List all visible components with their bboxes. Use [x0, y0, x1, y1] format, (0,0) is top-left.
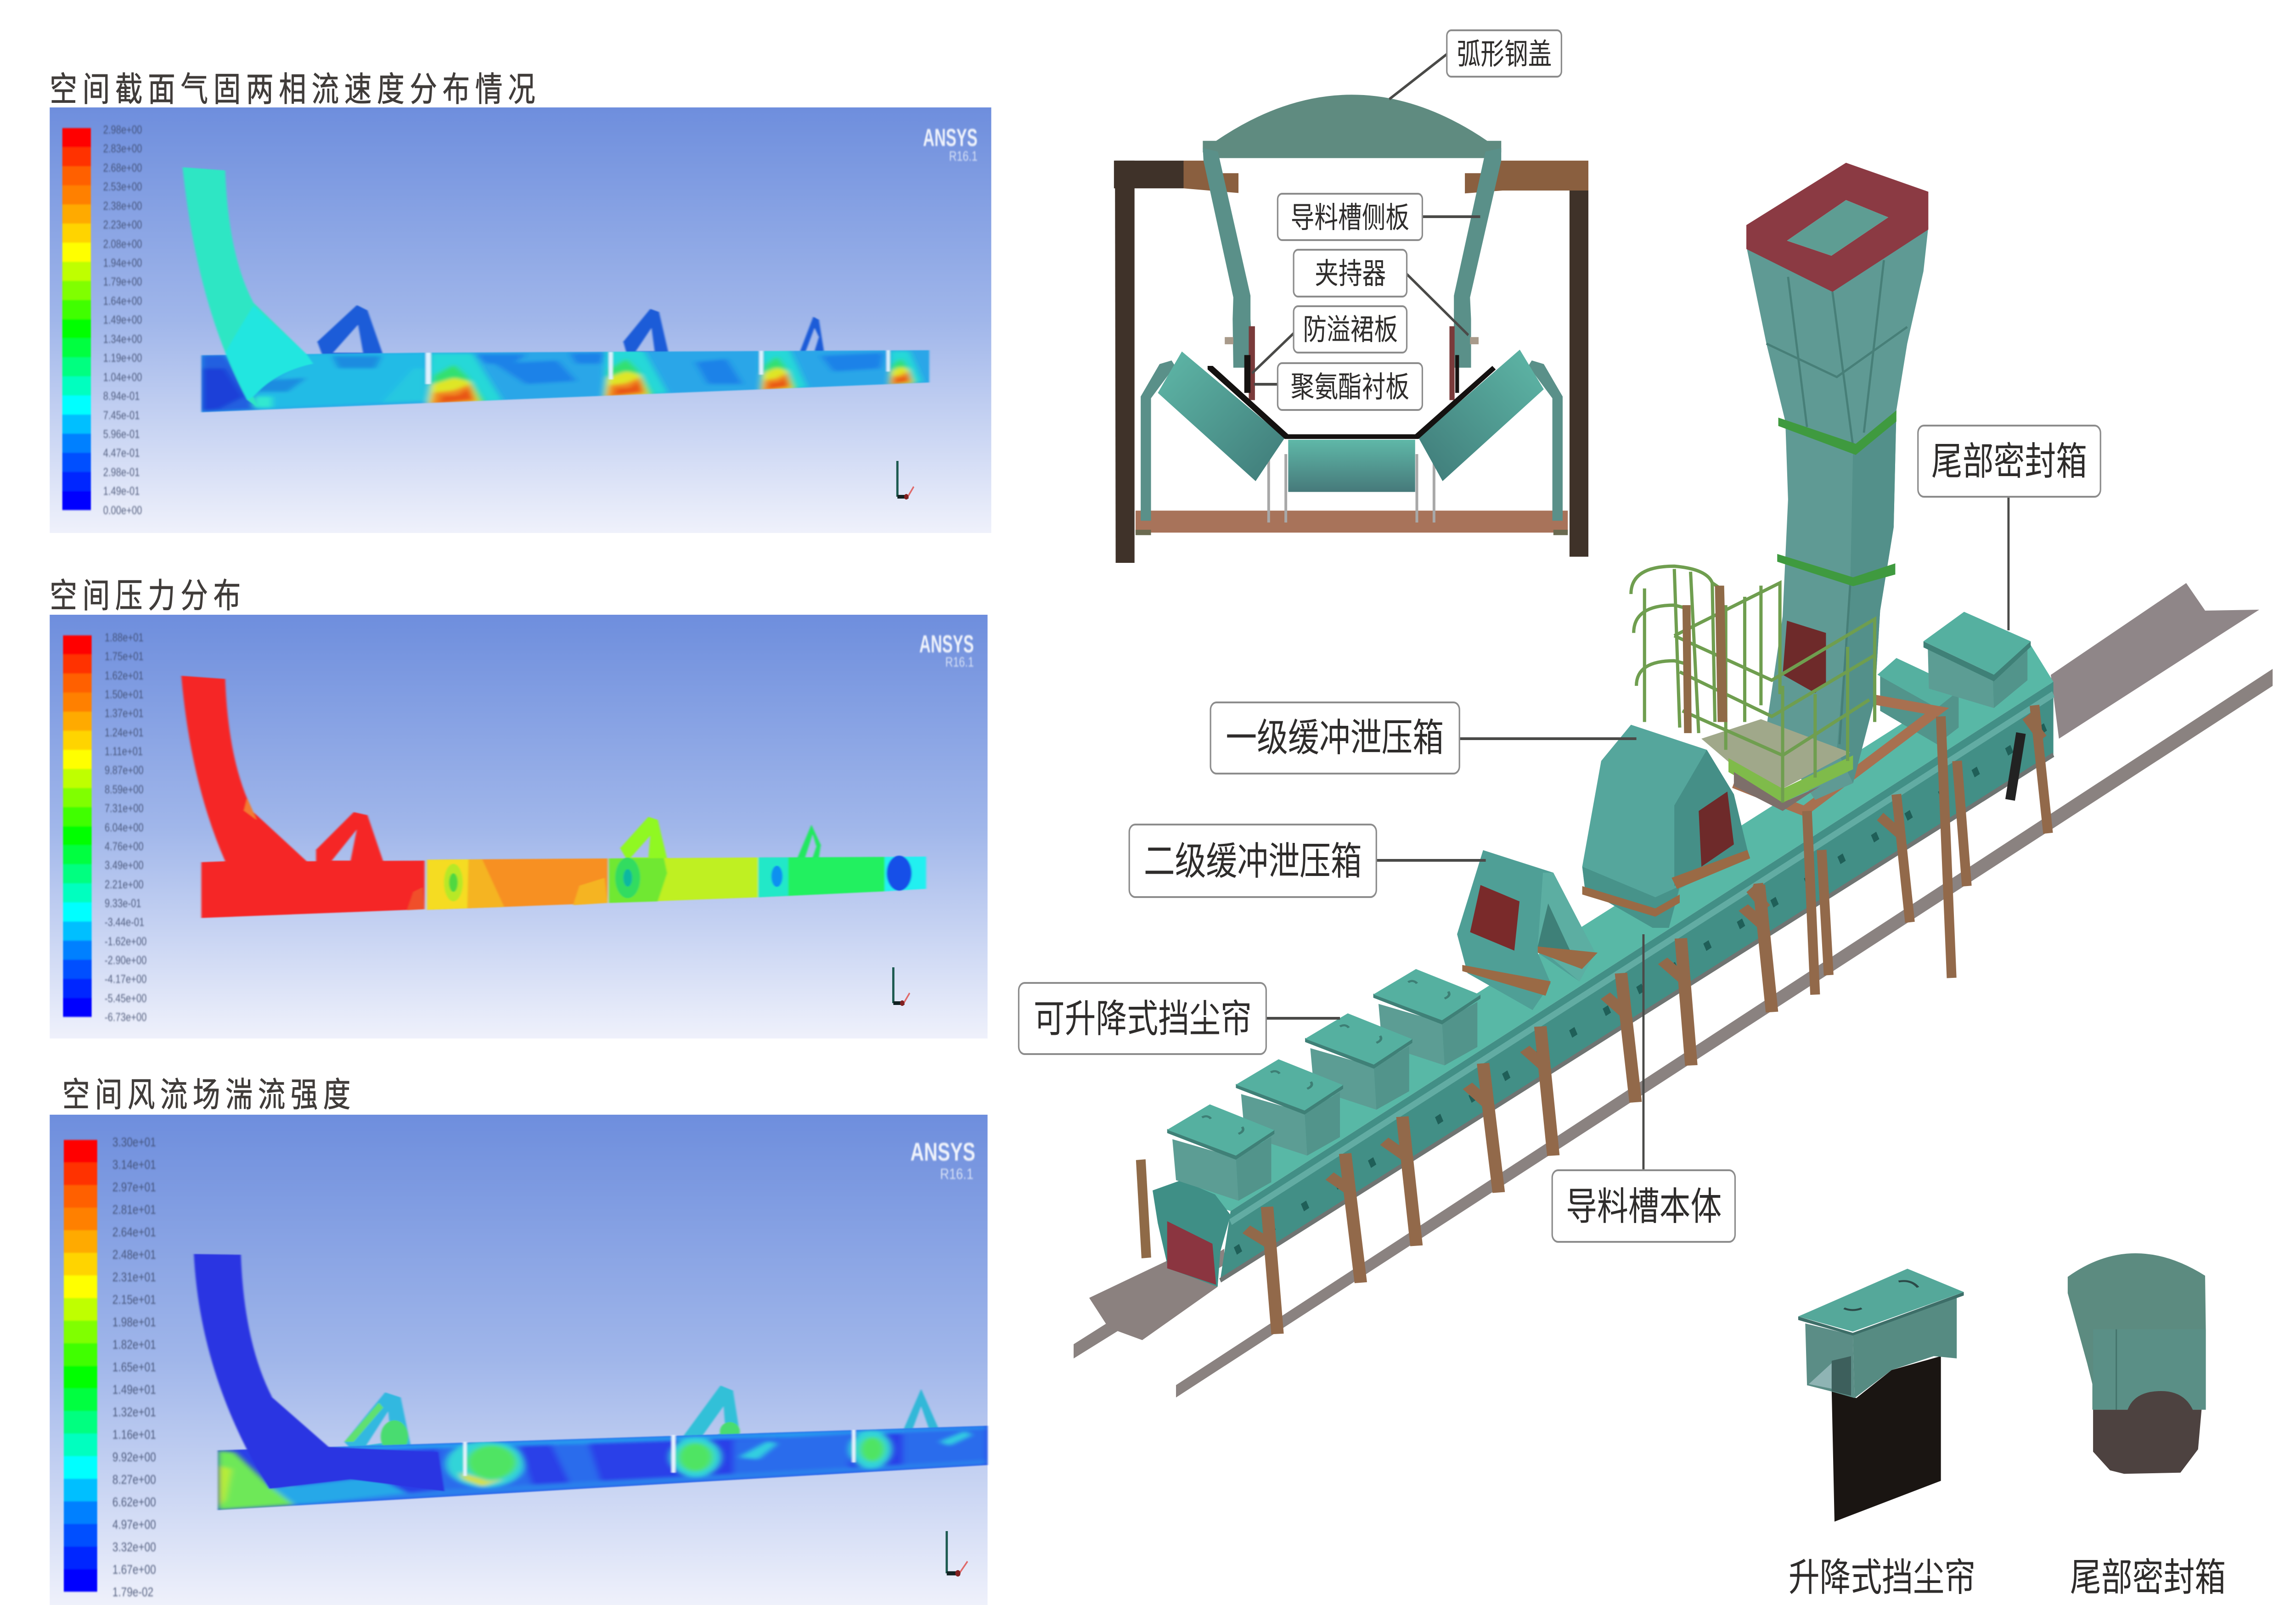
colour legend: velocity: 1.04e+00 — [103, 370, 142, 384]
colour legend: pressure: -3.44e-01 — [105, 915, 144, 929]
colour legend: velocity: 1.79e+00 — [103, 275, 142, 288]
colour legend: velocity: 2.38e+00 — [103, 199, 142, 213]
colour legend: velocity: 1.94e+00 — [103, 256, 142, 269]
label: primary buffer relief box: 一级缓冲泄压箱 — [1226, 717, 1444, 760]
label: chute side plate — [1277, 194, 1480, 240]
pressure contour geometry — [181, 676, 926, 918]
ANSYS logo — [919, 631, 974, 670]
colour legend: velocity: 5.96e-01 — [103, 427, 140, 441]
colour legend: velocity: 2.98e-01 — [103, 466, 140, 479]
safety cage and handrails — [1631, 566, 1875, 802]
colour legend: velocity: 2.23e+00 — [103, 218, 142, 231]
axis triad — [897, 461, 914, 499]
colour legend: pressure: 1.37e+01 — [105, 707, 144, 720]
colour legend: pressure: 9.87e+00 — [105, 763, 144, 777]
arc steel cover — [1203, 95, 1501, 368]
title: pressure panel: 空间压力分布 — [50, 577, 241, 615]
colour legend: turbulence: 4.97e+00 — [113, 1518, 156, 1532]
dust curtain boxes — [1167, 969, 1480, 1201]
colour legend: turbulence: 1.79e-02 — [113, 1585, 153, 1599]
colour legend: velocity: 2.68e+00 — [103, 161, 142, 174]
isometric chute assembly — [1074, 163, 2273, 1397]
colour legend: pressure: 6.04e+00 — [105, 821, 144, 834]
colour legend: turbulence: 2.48e+01 — [113, 1248, 156, 1262]
colour legend: pressure: -4.17e+00 — [105, 972, 146, 986]
colour legend: velocity: 2.08e+00 — [103, 237, 142, 251]
rods — [1269, 454, 1434, 522]
ANSYS logo: ANSYS — [911, 1137, 975, 1166]
label: chute side plate: 导料槽侧板 — [1291, 202, 1409, 234]
colour legend: velocity: 2.53e+00 — [103, 180, 142, 193]
ANSYS logo: R16.1 — [949, 148, 978, 164]
colour legend: pressure: 2.21e+00 — [105, 878, 144, 891]
colour legend: velocity: 1.49e+00 — [103, 313, 142, 326]
panel: turbulence intensity contour — [50, 1115, 988, 1605]
back support post — [1141, 1160, 1146, 1258]
belt / polyurethane liner — [1208, 366, 1496, 439]
hopper tube — [1746, 227, 1928, 800]
colour legend: turbulence: 1.49e+01 — [113, 1383, 156, 1397]
colour legend: turbulence: 3.30e+01 — [113, 1135, 156, 1150]
colour legend: turbulence: 2.15e+01 — [113, 1293, 156, 1307]
colour legend: turbulence: 1.82e+01 — [113, 1338, 156, 1352]
colour legend: turbulence: 1.32e+01 — [113, 1405, 156, 1420]
axis triad — [947, 1531, 968, 1577]
colour legend: pressure: -5.45e+00 — [105, 992, 146, 1005]
support frame — [1114, 161, 1588, 563]
colour legend: pressure — [63, 631, 146, 1024]
ANSYS logo: ANSYS — [919, 631, 974, 658]
colour legend: pressure: 7.31e+00 — [105, 802, 144, 815]
colour legend: velocity: 2.83e+00 — [103, 142, 142, 155]
hopper door — [1783, 621, 1826, 693]
label: clamp — [1294, 250, 1469, 335]
colour legend: pressure: 1.75e+01 — [105, 650, 144, 663]
caption: tail seal box: 尾部密封箱 — [2070, 1556, 2226, 1599]
idler rollers — [1158, 350, 1544, 492]
secondary buffer box — [1457, 850, 1598, 1010]
caption: lifting dust curtain: 升降式挡尘帘 — [1789, 1556, 1975, 1599]
skirt and clamp — [1225, 326, 1479, 400]
title: velocity panel: 空间截面气固两相流速度分布情况 — [50, 71, 535, 109]
label: chute body — [1552, 934, 1735, 1242]
colour legend: pressure: -6.73e+00 — [105, 1010, 146, 1024]
colour legend: pressure: -2.90e+00 — [105, 954, 146, 967]
label: chute body: 导料槽本体 — [1566, 1185, 1722, 1229]
panel: gas-solid velocity contour — [50, 107, 991, 533]
colour legend: pressure: 4.76e+00 — [105, 840, 144, 853]
far-end seal boxes — [1877, 612, 2031, 744]
platform — [1701, 719, 1850, 789]
colour legend: pressure: -1.62e+00 — [105, 935, 146, 948]
label: tail seal box — [1918, 426, 2100, 630]
colour legend: turbulence: 1.16e+01 — [113, 1428, 156, 1442]
colour legend: pressure: 1.24e+01 — [105, 726, 144, 739]
colour legend: turbulence: 9.92e+00 — [113, 1450, 156, 1465]
conveyor belt and rails — [1074, 583, 2273, 1397]
label: clamp: 夹持器 — [1315, 258, 1386, 290]
feed hopper, platform and cage — [1631, 163, 1937, 811]
primary buffer box — [1582, 725, 1750, 928]
ANSYS logo: R16.1 — [940, 1166, 974, 1183]
axis triad — [893, 967, 910, 1006]
panel: pressure contour — [50, 615, 988, 1038]
label: liftable dust curtain — [1019, 983, 1340, 1054]
colour legend: turbulence — [64, 1135, 156, 1599]
colour legend: velocity: 4.47e-01 — [103, 446, 140, 460]
chute entry arch and curtain — [1153, 1180, 1231, 1287]
ANSYS logo: R16.1 — [945, 654, 974, 670]
colour legend: turbulence: 6.62e+00 — [113, 1495, 156, 1510]
colour legend: velocity: 7.45e-01 — [103, 409, 140, 422]
label: polyurethane liner: 聚氨酯衬板 — [1291, 371, 1409, 404]
colour legend: turbulence: 2.97e+01 — [113, 1180, 156, 1195]
colour legend: turbulence: 1.65e+01 — [113, 1360, 156, 1375]
velocity contour geometry — [183, 167, 929, 412]
colour legend: turbulence: 3.32e+00 — [113, 1540, 156, 1554]
label: secondary buffer relief box: 二级缓冲泄压箱 — [1144, 840, 1362, 883]
colour legend: turbulence: 2.64e+01 — [113, 1225, 156, 1240]
colour legend: velocity: 1.64e+00 — [103, 294, 142, 308]
title: turbulence panel: 空间风流场湍流强度 — [62, 1076, 350, 1114]
label: secondary buffer relief box — [1129, 825, 1486, 897]
turbulence contour geometry — [194, 1254, 988, 1510]
colour legend: velocity: 1.34e+00 — [103, 332, 142, 346]
chute body — [1169, 643, 2054, 1280]
colour legend: turbulence: 1.67e+00 — [113, 1563, 156, 1577]
label: polyurethane liner — [1254, 363, 1422, 410]
colour legend: turbulence: 1.98e+01 — [113, 1315, 156, 1330]
ANSYS logo — [911, 1137, 975, 1183]
colour legend: turbulence: 3.14e+01 — [113, 1158, 156, 1172]
label: anti-spill skirt — [1252, 306, 1407, 373]
roller brackets — [1141, 360, 1563, 521]
colour legend: turbulence: 8.27e+00 — [113, 1473, 156, 1487]
detail: tail seal box — [2068, 1253, 2206, 1474]
cross-section drawing of guide chute — [1114, 95, 1588, 563]
red top collar — [1746, 163, 1928, 292]
colour legend: velocity: 8.94e-01 — [103, 389, 140, 403]
colour legend: pressure: 1.50e+01 — [105, 688, 144, 701]
colour legend: turbulence: 2.31e+01 — [113, 1270, 156, 1285]
colour legend: velocity: 0.00e+00 — [103, 504, 142, 517]
colour legend: velocity: 1.49e-01 — [103, 484, 140, 498]
brown support beams — [1734, 700, 1937, 811]
chute support legs — [1246, 705, 2048, 1334]
colour legend: pressure: 1.88e+01 — [105, 631, 144, 644]
colour legend: turbulence: 2.81e+01 — [113, 1203, 156, 1217]
detail: lifting dust curtain — [1798, 1268, 1964, 1521]
colour legend: pressure: 1.11e+01 — [105, 745, 143, 758]
colour legend: pressure: 3.49e+00 — [105, 859, 144, 872]
colour legend: pressure: 9.33e-01 — [105, 897, 141, 910]
label: arc steel cover: 弧形钢盖 — [1457, 38, 1552, 71]
label: tail seal box: 尾部密封箱 — [1931, 440, 2087, 483]
label: anti-spill skirt: 防溢裙板 — [1303, 314, 1398, 346]
ANSYS logo: ANSYS — [923, 124, 978, 152]
label: arc steel cover — [1390, 30, 1561, 99]
colour legend: velocity: 1.19e+00 — [103, 351, 142, 365]
colour legend: velocity — [62, 123, 142, 517]
label: liftable dust curtain: 可升降式挡尘帘 — [1034, 998, 1252, 1041]
green bands — [1777, 410, 1896, 586]
colour legend: pressure: 1.62e+01 — [105, 669, 144, 682]
colour legend: pressure: 8.59e+00 — [105, 783, 144, 796]
colour legend: velocity: 2.98e+00 — [103, 123, 142, 136]
ANSYS logo — [923, 124, 978, 164]
label: primary buffer relief box — [1210, 702, 1637, 774]
